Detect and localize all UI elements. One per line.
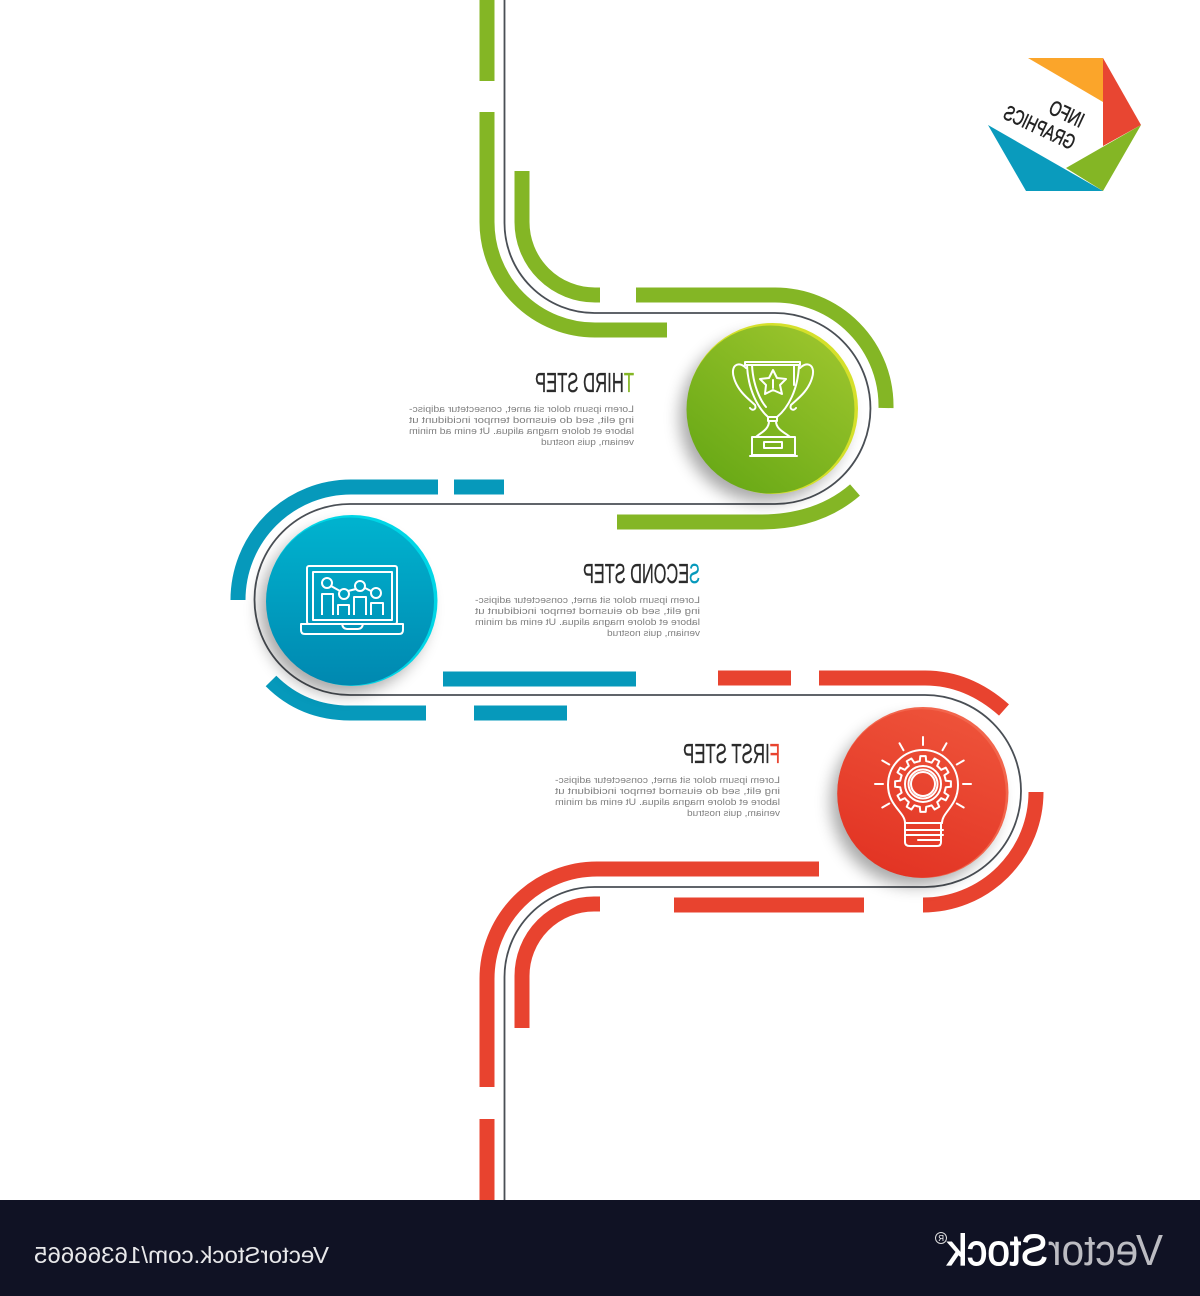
hexagon infographics logo: GRAPHICS — [1000, 102, 1079, 155]
second step heading: SECOND STEP — [583, 558, 700, 589]
panel: third step — [409, 323, 858, 502]
first step heading: FIRST STEP — [683, 738, 780, 769]
second step body text — [475, 595, 700, 639]
second step body text: veniam, quis nostrud — [607, 628, 700, 639]
third step heading: THIRD STEP — [535, 367, 634, 398]
footer logo: Stock — [946, 1226, 1048, 1275]
footer logo: Vector — [1048, 1226, 1163, 1275]
blue road segments — [238, 487, 636, 713]
first step body text: labore et dolore magna aliqua. Ut enim ad minim — [555, 797, 780, 808]
second step circle with laptop icon — [260, 515, 438, 694]
third step body text: Lorem ipsum dolor sit amet, consectetur adipisc- — [409, 404, 634, 415]
third step body text: labore et dolore magna aliqua. Ut enim ad minim — [409, 426, 634, 437]
first step body text — [555, 775, 780, 819]
hexagon infographics logo — [988, 58, 1141, 191]
first step body text: Lorem ipsum dolor sit amet, consectetur adipisc- — [555, 775, 780, 786]
second step body text: labore et dolore magna aliqua. Ut enim ad minim — [475, 617, 700, 628]
footer logo — [936, 1226, 1163, 1275]
footer url: VectorStock.com/16366665 — [34, 1242, 329, 1268]
first step circle with light bulb icon — [831, 707, 1008, 886]
panel: second step — [260, 515, 700, 694]
first step body text: veniam, quis nostrud — [687, 808, 780, 819]
red road segments — [487, 678, 1036, 1200]
panel: first step — [555, 707, 1008, 886]
third step body text: veniam, quis nostrud — [541, 437, 634, 448]
third step body text — [409, 404, 634, 448]
road centre line — [254, 0, 1021, 1200]
hexagon infographics logo: INFO — [1045, 96, 1088, 133]
green road segments — [487, 0, 886, 522]
second step body text: ing elit, sed do eiusmod tempor incididunt ut — [475, 606, 700, 617]
second step body text: Lorem ipsum dolor sit amet, consectetur adipisc- — [475, 595, 700, 606]
first step body text: ing elit, sed do eiusmod tempor incididunt ut — [555, 786, 780, 797]
third step body text: ing elit, sed do eiusmod tempor incididunt ut — [409, 415, 634, 426]
footer logo: R — [938, 1234, 944, 1243]
third step circle with trophy icon — [680, 323, 858, 502]
footer bar — [0, 1200, 1200, 1296]
